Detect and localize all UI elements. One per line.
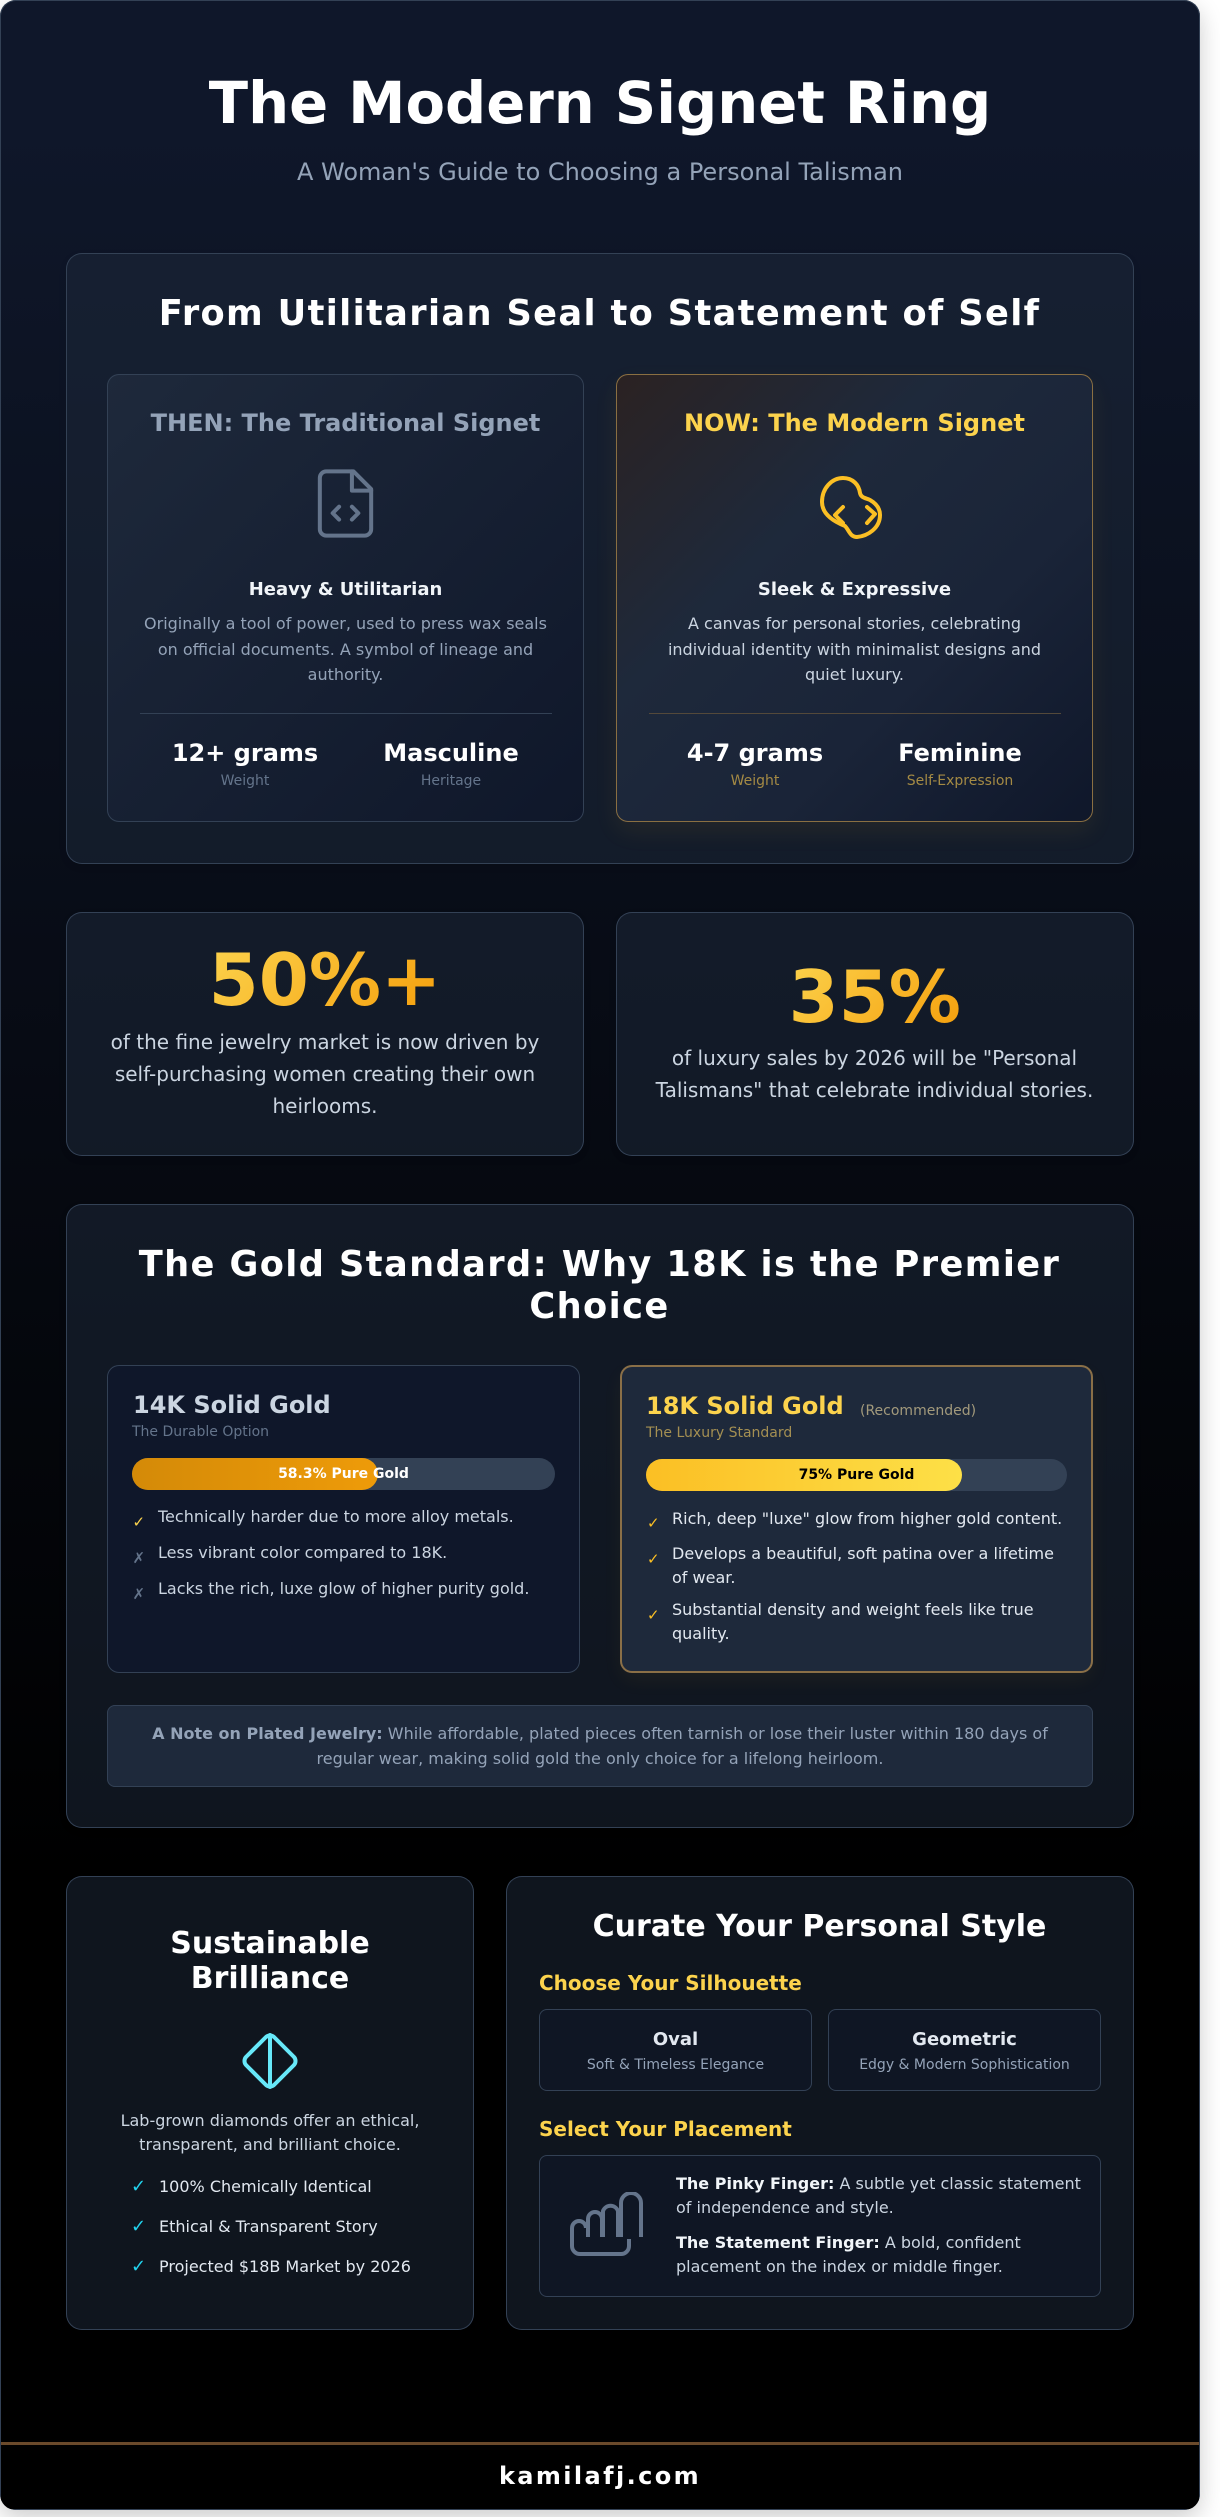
benefits list: Ethical & Transparent Story bbox=[159, 2217, 378, 2236]
placement text: The Statement Finger: A bold, confident bbox=[676, 2233, 1021, 2252]
note: plated jewelry bbox=[107, 1705, 1093, 1787]
feature list: ✓ bbox=[647, 1514, 660, 1532]
stat: heritage bbox=[383, 739, 519, 789]
description: A canvas for personal stories, celebrating bbox=[688, 614, 1021, 633]
stat text bbox=[111, 1030, 539, 1118]
purity bar 75%: 75% Pure Gold bbox=[799, 1467, 914, 1483]
card title: 14K Solid Gold bbox=[133, 1391, 331, 1419]
feature list: ✗ bbox=[132, 1549, 145, 1567]
feature list: of wear. bbox=[672, 1568, 735, 1587]
feature list: ✓ bbox=[647, 1550, 660, 1568]
heading: Curate Your Personal Style bbox=[593, 1909, 1046, 1944]
stat: self-expression bbox=[898, 739, 1022, 789]
icon: diamond bbox=[242, 2033, 298, 2089]
description: transparent, and brilliant choice. bbox=[139, 2135, 401, 2154]
stat: weight: 4-7 grams bbox=[687, 739, 823, 767]
benefits list: Projected $18B Market by 2026 bbox=[159, 2257, 411, 2276]
big number: 35% bbox=[789, 955, 961, 1039]
stat text: of luxury sales by 2026 will be "Personal bbox=[672, 1046, 1077, 1070]
feature list: Develops a beautiful, soft patina over a lifetime bbox=[672, 1544, 1054, 1563]
panel: then vs now bbox=[66, 253, 1134, 864]
note: plated jewelry: regular wear, making solid gold the only choice for a lifelong heirloom. bbox=[316, 1748, 883, 1768]
feature list: Substantial density and weight feels like true bbox=[672, 1600, 1034, 1619]
card subheading: Sleek & Expressive bbox=[758, 578, 951, 600]
subheading: silhouette: Choose Your Silhouette bbox=[539, 1971, 802, 1995]
subtitle: A Woman's Guide to Choosing a Personal Talisman bbox=[297, 158, 903, 186]
panel: stat 50% bbox=[66, 912, 584, 1156]
recommended tag: (Recommended) bbox=[860, 1402, 976, 1418]
heading: gold standard bbox=[138, 1244, 1060, 1326]
divider bbox=[140, 713, 552, 714]
feature list: ✗ bbox=[132, 1585, 145, 1603]
stat: weight bbox=[172, 739, 318, 789]
option: geometric: Edgy & Modern Sophistication bbox=[859, 2056, 1070, 2072]
placement text: The Pinky Finger: A subtle yet classic statement bbox=[676, 2174, 1081, 2193]
card title: THEN: The Traditional Signet bbox=[151, 409, 540, 437]
title: The Modern Signet Ring bbox=[209, 70, 991, 137]
placement box bbox=[539, 2155, 1101, 2297]
panel: curate your style bbox=[506, 1876, 1134, 2330]
panel: sustainable brilliance bbox=[66, 1876, 474, 2330]
icon: document code bbox=[318, 469, 374, 538]
subheading: placement: Select Your Placement bbox=[539, 2117, 792, 2141]
feature list: Lacks the rich, luxe glow of higher purity gold. bbox=[158, 1579, 529, 1598]
purity bar 58.3%: 58.3% Pure Gold bbox=[278, 1466, 409, 1482]
card: 14K gold bbox=[107, 1365, 580, 1673]
stat: weight: 12+ grams bbox=[172, 739, 318, 767]
heading: Sustainable bbox=[170, 1926, 370, 1960]
stat text: self-purchasing women creating their own bbox=[115, 1062, 535, 1086]
feature list: Less vibrant color compared to 18K. bbox=[158, 1543, 447, 1562]
card subheading: Heavy & Utilitarian bbox=[249, 578, 442, 600]
description: on official documents. A symbol of lineage and bbox=[158, 640, 533, 659]
description bbox=[668, 614, 1041, 684]
description: authority. bbox=[308, 665, 383, 684]
description bbox=[121, 2111, 419, 2154]
panel: gold standard bbox=[66, 1204, 1134, 1828]
stat text: heirlooms. bbox=[272, 1094, 378, 1118]
feature list: ✓ bbox=[132, 1513, 145, 1531]
card title: 18K Solid Gold bbox=[646, 1392, 844, 1420]
stat text: of the fine jewelry market is now driven by bbox=[111, 1030, 539, 1054]
feature list: Technically harder due to more alloy metals. bbox=[158, 1507, 514, 1526]
heading: gold standard: Choice bbox=[529, 1286, 670, 1326]
description bbox=[144, 614, 547, 684]
stat text: Talismans" that celebrate individual stories. bbox=[656, 1078, 1093, 1102]
feature list bbox=[647, 1508, 1062, 1643]
card subtitle: The Durable Option bbox=[132, 1424, 269, 1440]
benefits list: ✓ bbox=[131, 2256, 146, 2277]
purity bar 75% bbox=[646, 1459, 1067, 1491]
placement text bbox=[676, 2174, 1081, 2217]
card: then bbox=[107, 374, 584, 822]
description: Lab-grown diamonds offer an ethical, bbox=[121, 2111, 419, 2130]
description: quiet luxury. bbox=[805, 665, 904, 684]
stat: self-expression: Feminine bbox=[898, 739, 1022, 767]
card title: NOW: The Modern Signet bbox=[684, 409, 1025, 437]
stat: heritage: Masculine bbox=[383, 739, 519, 767]
option: oval: Oval bbox=[653, 2029, 698, 2050]
note: plated jewelry: A Note on Plated Jewelry: While affordable, plated pieces often tarnish or lose their luster within 180 days of bbox=[152, 1724, 1048, 1742]
heading: gold standard: The Gold Standard: Why 18K is the Premier bbox=[139, 1244, 1060, 1284]
placement text: placement on the index or middle finger. bbox=[676, 2257, 1003, 2276]
benefits list bbox=[131, 2176, 411, 2277]
placement text: of independence and style. bbox=[676, 2198, 894, 2217]
big number: 50%+ bbox=[209, 938, 441, 1022]
heading: from seal to statement: From Utilitarian Seal to Statement of Self bbox=[159, 293, 1040, 334]
placement text bbox=[676, 2233, 1021, 2276]
divider bbox=[649, 713, 1061, 714]
feature list bbox=[132, 1507, 529, 1603]
option: geometric bbox=[828, 2009, 1101, 2091]
heading bbox=[170, 1926, 370, 1996]
footer site name: kamilafj.com bbox=[499, 2462, 701, 2490]
option: oval: Soft & Timeless Elegance bbox=[587, 2056, 764, 2072]
panel: stat 35% bbox=[616, 912, 1134, 1156]
feature list: Rich, deep "luxe" glow from higher gold content. bbox=[672, 1508, 1062, 1528]
card: now bbox=[616, 374, 1093, 822]
feature list: ✓ bbox=[647, 1606, 660, 1624]
stat: heritage: Heritage bbox=[421, 773, 481, 789]
heading: Brilliance bbox=[191, 1960, 349, 1996]
footer bbox=[1, 2442, 1199, 2509]
option: oval bbox=[539, 2009, 812, 2091]
option: geometric: Geometric bbox=[912, 2029, 1017, 2050]
card subtitle: The Luxury Standard bbox=[646, 1425, 792, 1441]
icon: hand bbox=[570, 2192, 643, 2256]
benefits list: ✓ bbox=[131, 2216, 146, 2237]
description: Originally a tool of power, used to press wax seals bbox=[144, 614, 547, 633]
feature list: quality. bbox=[672, 1624, 730, 1643]
benefits list: ✓ bbox=[131, 2176, 146, 2197]
benefits list: 100% Chemically Identical bbox=[159, 2177, 372, 2196]
stat text bbox=[656, 1046, 1093, 1102]
description: individual identity with minimalist designs and bbox=[668, 640, 1041, 659]
stat: weight: Weight bbox=[731, 773, 779, 789]
stat: weight bbox=[687, 739, 823, 789]
card: 18K gold bbox=[620, 1365, 1093, 1673]
stat: self-expression: Self-Expression bbox=[907, 773, 1013, 789]
purity bar 58.3% bbox=[132, 1458, 555, 1490]
stat: weight: Weight bbox=[221, 773, 269, 789]
icon: modern signet bbox=[820, 476, 882, 539]
